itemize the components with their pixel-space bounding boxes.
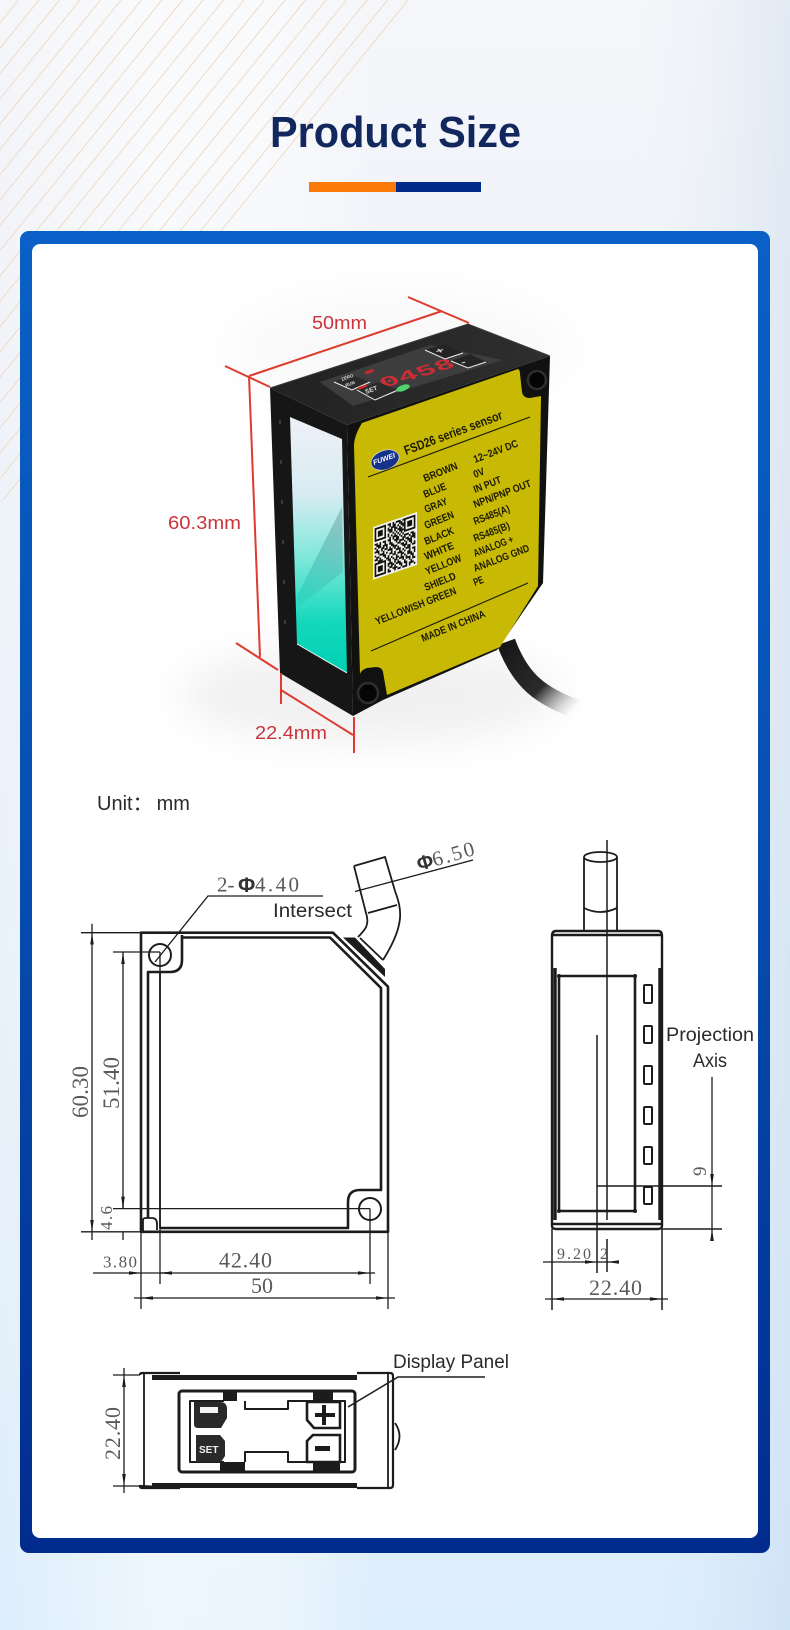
photo soft shadow (180, 290, 570, 743)
display panel on top face: RUN (345, 380, 356, 388)
display panel on top face: 0458 (375, 356, 460, 392)
top view outline (140, 1373, 400, 1488)
display panel on top face: + (432, 346, 447, 356)
top view buttons: SET (199, 1445, 218, 1456)
dim text: 9.20: 9.20 (557, 1246, 591, 1263)
made in china: MADE IN CHINA (420, 608, 487, 645)
dim text: 50: 50 (251, 1273, 273, 1298)
display panel leader (348, 1377, 485, 1407)
top view panel (179, 1391, 355, 1472)
display panel on top face (320, 344, 503, 406)
dim text: 2-Φ4.40 (217, 872, 299, 897)
top view dimension (113, 1368, 140, 1493)
logo: FUWEI (372, 452, 397, 467)
wire function column: ANALOG GND (472, 542, 531, 575)
sensor body (270, 324, 550, 716)
wire colour column: GREEN (423, 509, 456, 532)
title: Product Size (270, 108, 521, 157)
display panel on top face: - (457, 358, 469, 367)
dim text: Φ6.50 (414, 836, 477, 876)
mounting holes (358, 371, 546, 703)
dimension: 50mm: 50mm (312, 312, 367, 333)
hole leader (155, 896, 323, 962)
wire function column: RS485(A) (472, 503, 512, 528)
side view body (552, 931, 662, 1229)
side view cable (584, 852, 617, 931)
wire function column (472, 438, 533, 589)
QR code (373, 512, 417, 580)
dim text: 9: 9 (690, 1166, 711, 1176)
wire function column: 0V (472, 466, 486, 481)
side marks (280, 420, 285, 624)
wire function column: NPN/PNP OUT (472, 478, 533, 511)
dim text: 2-Φ4.40: 4.40 (255, 872, 299, 896)
top view buttons (194, 1402, 340, 1462)
wire function column: IN PUT (472, 474, 504, 496)
wire function column: 12~24V DC (472, 438, 520, 466)
wire colour column: SHIELD (423, 570, 458, 594)
label: Projection Axis: Projection (666, 1024, 754, 1046)
label: Intersect: Intersect (273, 900, 353, 922)
technical drawing: top view (100, 1351, 509, 1493)
dim text: 60.30: 60.30 (68, 1066, 93, 1118)
product photo: sensor with red dimensions (168, 290, 582, 753)
dim text: 2-Φ4.40: Φ (238, 874, 255, 897)
wire colour column: BLUE (422, 481, 448, 501)
dimension: 60.3mm: 60.3mm (168, 512, 241, 533)
wire colour column: YELLOW (424, 552, 463, 578)
dim lines (92, 924, 395, 1298)
display panel on top face: SET (364, 385, 379, 396)
red dimension lines (225, 297, 469, 753)
front view outline (141, 933, 388, 1232)
cable leader (355, 860, 473, 892)
dim text: 22.40 rotated: 22.40 (100, 1407, 125, 1460)
logo (368, 446, 402, 474)
display panel on top face: ZERO (341, 373, 355, 382)
side dims (543, 1077, 712, 1299)
dim text: 2-Φ4.40: 2- (217, 872, 234, 896)
dim text: 4.6: 4.6 (97, 1206, 116, 1230)
panel: blue frame with white card (20, 231, 770, 1553)
wire colour column: BROWN (422, 460, 460, 485)
wire colour column: YELLOWISH GREEN (374, 585, 458, 628)
unit note: Unit：mm (97, 793, 190, 815)
cable stub (354, 857, 400, 960)
technical drawing: side view (543, 840, 754, 1310)
dim text: 22.40: 22.40 (589, 1275, 642, 1300)
wire colour column (374, 460, 463, 628)
label heading: FSD26 series sensor (402, 407, 504, 458)
yellow product label (354, 369, 541, 695)
wire function column: ANALOG + (472, 534, 515, 560)
sensor optical window (290, 417, 347, 673)
wire colour column: GRAY (423, 496, 449, 516)
technical drawing: front view (68, 836, 477, 1309)
dim text: Φ6.50: Φ (414, 850, 436, 876)
axis lines (552, 840, 722, 1310)
dim text: 51.40: 51.40 (99, 1057, 124, 1109)
dim text: Φ6.50: 6.50 (429, 836, 477, 871)
label: Projection Axis (666, 1024, 754, 1072)
side view slots (644, 985, 652, 1204)
wire function column: RS485(B) (472, 520, 512, 545)
title underline bar (309, 182, 481, 192)
dim text: 2: 2 (600, 1246, 608, 1263)
dim text: 42.40: 42.40 (219, 1248, 272, 1272)
label: Display Panel: Display Panel (393, 1351, 509, 1373)
wire function column: PE (472, 574, 485, 589)
centre and extension lines (81, 933, 388, 1309)
label: Projection Axis: Axis (693, 1050, 727, 1072)
wire colour column: BLACK (423, 525, 456, 548)
wire colour column: WHITE (423, 540, 456, 563)
dimension: 22.4mm: 22.4mm (255, 722, 327, 743)
sensor cable (506, 642, 582, 711)
dim text: 3.80: 3.80 (103, 1252, 137, 1272)
